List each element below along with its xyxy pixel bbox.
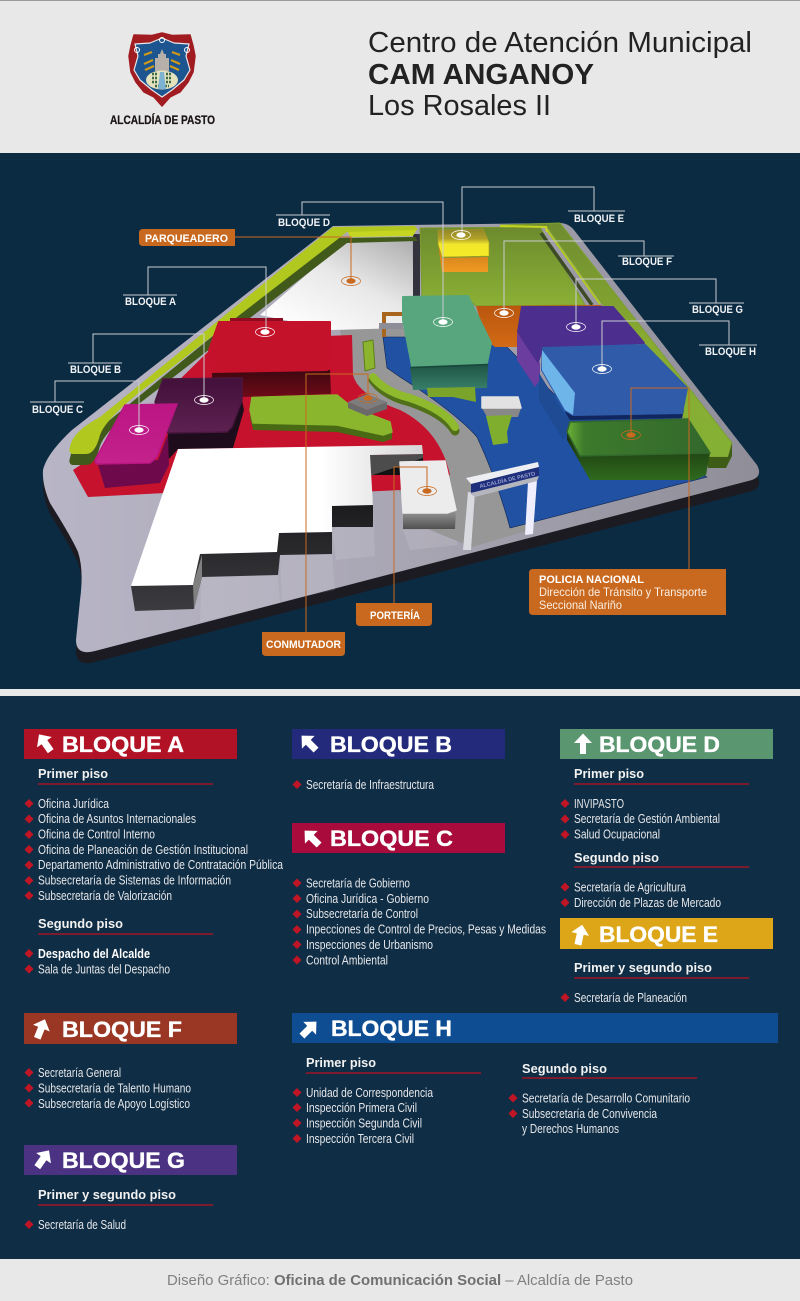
callout: Bloque G bbox=[566, 279, 744, 332]
block C bbox=[95, 404, 177, 488]
callout: Bloque H: BLOQUE H bbox=[705, 346, 756, 358]
list: Bloque F bbox=[24, 1066, 191, 1111]
callout: Bloque F bbox=[494, 241, 674, 318]
list: primer piso: Inspección Tercera Civil bbox=[306, 1132, 414, 1146]
left green strip side bbox=[69, 237, 418, 465]
curved green strip bbox=[373, 377, 455, 431]
list: Bloque C: Secretaría de Gobierno bbox=[306, 876, 410, 890]
callout: Policía Nacional: POLICIA NACIONAL bbox=[539, 574, 644, 586]
subheading: Primer y segundo piso: Primer y segundo piso bbox=[38, 1187, 176, 1202]
directory panel background bbox=[0, 696, 800, 1259]
callout: Bloque B: BLOQUE B bbox=[70, 364, 121, 376]
callout: Parqueadero bbox=[139, 229, 360, 286]
list: segundo piso: Dirección de Plazas de Mercado bbox=[574, 896, 721, 910]
subheading: Segundo piso: Segundo piso bbox=[522, 1061, 607, 1076]
heading: Bloque E: BLOQUE E bbox=[599, 922, 718, 947]
title: CAM ANGANOY bbox=[368, 59, 594, 91]
panel: Bloque H bbox=[292, 1013, 778, 1146]
subheading: Primer piso: Primer piso bbox=[574, 766, 644, 781]
callout: Bloque B bbox=[68, 334, 214, 404]
heading: Bloque E bbox=[560, 918, 773, 949]
platform surface bbox=[43, 223, 759, 652]
platform edge bbox=[43, 234, 759, 663]
parking bbox=[260, 235, 414, 330]
callout: Bloque A bbox=[123, 267, 274, 336]
heading: Bloque G: BLOQUE G bbox=[62, 1148, 185, 1173]
green patch under white box bbox=[486, 415, 512, 445]
blue ground bbox=[383, 337, 707, 528]
heading: Bloque F: BLOQUE F bbox=[62, 1017, 182, 1042]
heading: Bloque A bbox=[24, 729, 237, 759]
callout: Bloque C bbox=[30, 381, 148, 434]
map: campus 3D plan bbox=[43, 223, 759, 663]
list: Bloque G: Secretaría de Salud bbox=[38, 1218, 126, 1232]
title bbox=[368, 27, 752, 122]
panel: Bloque D bbox=[560, 729, 773, 910]
subheading: Primer piso: Primer piso bbox=[38, 766, 108, 781]
list: primer piso: Departamento Administrativo de Contratación Pública bbox=[38, 858, 283, 872]
heading: Bloque D: BLOQUE D bbox=[599, 732, 720, 757]
list: primer piso: Oficina de Control Interno bbox=[38, 828, 155, 842]
subheading: Primer piso: Primer piso bbox=[306, 1055, 376, 1070]
block G bbox=[517, 307, 644, 387]
panel: Bloque E bbox=[560, 918, 773, 1005]
heading: Bloque A: BLOQUE A bbox=[62, 732, 184, 757]
footer: Diseño Gráfico: Oficina de Comunicación Social – Alcaldía de Pasto bbox=[167, 1273, 633, 1289]
red ground bbox=[73, 335, 450, 500]
subheading: Segundo piso: Segundo piso bbox=[38, 916, 123, 931]
left green strip bbox=[69, 226, 418, 454]
list: primer piso: Subsecretaría de Sistemas de Información bbox=[38, 874, 231, 888]
central green island bbox=[250, 415, 392, 442]
list: Bloque F: Subsecretaría de Talento Humano bbox=[38, 1082, 191, 1096]
heading: Bloque H bbox=[292, 1013, 778, 1043]
floor reflections bbox=[200, 505, 458, 622]
list: segundo piso bbox=[560, 880, 721, 910]
block H bbox=[539, 345, 687, 440]
map panel background bbox=[0, 153, 800, 689]
white building bbox=[131, 445, 423, 611]
right strip bbox=[500, 223, 732, 457]
list: segundo piso: y Derechos Humanos bbox=[522, 1122, 619, 1136]
small grey box bbox=[348, 394, 387, 416]
title: Los Rosales II bbox=[368, 90, 551, 122]
subheading: Segundo piso: Segundo piso bbox=[574, 850, 659, 865]
panel: Bloque C bbox=[292, 823, 546, 968]
list: segundo piso bbox=[508, 1092, 690, 1136]
callout: Bloque G: BLOQUE G bbox=[692, 304, 743, 316]
list: primer piso: Inspección Primera Civil bbox=[306, 1101, 417, 1115]
heading: Bloque F bbox=[24, 1013, 237, 1044]
callout: Policía Nacional bbox=[529, 388, 726, 615]
callout: Parqueadero: PARQUEADERO bbox=[145, 233, 228, 245]
list: primer piso bbox=[24, 797, 283, 903]
panel: Bloque B bbox=[292, 729, 505, 792]
callout: Bloque D: BLOQUE D bbox=[278, 217, 330, 229]
callout: Conmutador: CONMUTADOR bbox=[266, 639, 341, 651]
portería building bbox=[400, 461, 456, 529]
block E bbox=[438, 229, 489, 272]
entrance gate bbox=[463, 462, 539, 550]
white box bbox=[482, 397, 521, 417]
footer bbox=[0, 1259, 800, 1301]
small green bar bbox=[363, 340, 375, 371]
list: Bloque C: Oficina Jurídica - Gobierno bbox=[306, 892, 429, 906]
police block bbox=[567, 419, 710, 480]
heading: Bloque G bbox=[24, 1145, 237, 1175]
list: primer piso: INVIPASTO bbox=[574, 797, 624, 811]
callout: Bloque E bbox=[452, 187, 625, 240]
header band bbox=[0, 0, 800, 153]
list: Bloque C: Control Ambiental bbox=[306, 954, 388, 968]
list: segundo piso: Sala de Juntas del Despacho bbox=[38, 962, 170, 976]
block D bbox=[403, 296, 491, 390]
callout: Bloque F: BLOQUE F bbox=[622, 256, 672, 268]
heading: Bloque B: BLOQUE B bbox=[330, 732, 452, 757]
list: primer piso: Oficina Jurídica bbox=[38, 797, 109, 811]
list: segundo piso bbox=[24, 947, 170, 976]
block A bbox=[209, 318, 331, 397]
callout: Portería bbox=[356, 467, 436, 626]
callout: Bloque D bbox=[276, 202, 452, 326]
brown arch bbox=[384, 314, 403, 337]
logo text: ALCALDÍA DE PASTO bbox=[110, 112, 215, 127]
separator strip bbox=[0, 689, 800, 696]
heading: Bloque C: BLOQUE C bbox=[330, 826, 453, 851]
upper green field bbox=[420, 227, 585, 306]
list: Bloque B: Secretaría de Infraestructura bbox=[306, 778, 434, 792]
list: primer piso: Inspección Segunda Civil bbox=[306, 1116, 422, 1130]
callout: Policía Nacional: Seccional Nariño bbox=[539, 598, 622, 612]
callout: Bloque H bbox=[592, 321, 757, 374]
list: Bloque C: Inpecciones de Control de Precios, Pesas y Medidas bbox=[306, 922, 546, 936]
entrance gate: ALCALDÍA DE PASTO bbox=[479, 469, 537, 490]
block F orange bbox=[476, 305, 602, 347]
list: primer piso: Secretaría de Gestión Ambiental bbox=[574, 812, 720, 826]
list: Bloque C bbox=[292, 876, 546, 968]
list: primer piso: Unidad de Correspondencia bbox=[306, 1086, 433, 1100]
callout: Bloque E: BLOQUE E bbox=[574, 213, 624, 225]
list: primer piso: Salud Ocupacional bbox=[574, 828, 660, 842]
road bbox=[340, 325, 530, 547]
heading: Bloque B bbox=[292, 729, 505, 759]
list: segundo piso: Subsecretaría de Convivencia bbox=[522, 1107, 657, 1121]
green patch under block D bbox=[427, 387, 476, 402]
heading: Bloque C bbox=[292, 823, 505, 853]
list: segundo piso: Secretaría de Agricultura bbox=[574, 880, 686, 894]
subheading: Primer y segundo piso: Primer y segundo piso bbox=[574, 960, 712, 975]
list: Bloque F: Subsecretaría de Apoyo Logístico bbox=[38, 1097, 190, 1111]
list: Bloque E: Secretaría de Planeación bbox=[574, 991, 687, 1005]
list: primer piso: Oficina de Asuntos Internacionales bbox=[38, 812, 196, 826]
callout: Conmutador bbox=[262, 374, 378, 656]
icon: Alcaldía de Pasto coat of arms bbox=[129, 33, 195, 106]
title: Centro de Atención Municipal bbox=[368, 27, 752, 59]
list: Bloque C: Inspecciones de Urbanismo bbox=[306, 938, 433, 952]
callout: Portería: PORTERÍA bbox=[370, 609, 420, 622]
list: primer piso bbox=[560, 797, 720, 842]
list: segundo piso: Secretaría de Desarrollo Comunitario bbox=[522, 1092, 690, 1106]
list: segundo piso: Despacho del Alcalde bbox=[38, 947, 150, 961]
callout: Policía Nacional: Dirección de Tránsito y Transporte bbox=[539, 585, 707, 599]
callout: Bloque A: BLOQUE A bbox=[125, 296, 176, 308]
list: primer piso bbox=[292, 1086, 433, 1146]
panel: Bloque A bbox=[24, 729, 283, 976]
block B bbox=[155, 378, 244, 460]
panel: Bloque F bbox=[24, 1013, 237, 1111]
list: Bloque F: Secretaría General bbox=[38, 1066, 121, 1080]
heading: Bloque H: BLOQUE H bbox=[331, 1016, 452, 1041]
list: primer piso: Oficina de Planeación de Gestión Institucional bbox=[38, 843, 248, 857]
list: Bloque C: Subsecretaría de Control bbox=[306, 907, 418, 921]
panel: Bloque G bbox=[24, 1145, 237, 1232]
callout: Bloque C: BLOQUE C bbox=[32, 404, 83, 416]
heading: Bloque D bbox=[560, 729, 773, 759]
list: primer piso: Subsecretaría de Valorización bbox=[38, 889, 172, 903]
